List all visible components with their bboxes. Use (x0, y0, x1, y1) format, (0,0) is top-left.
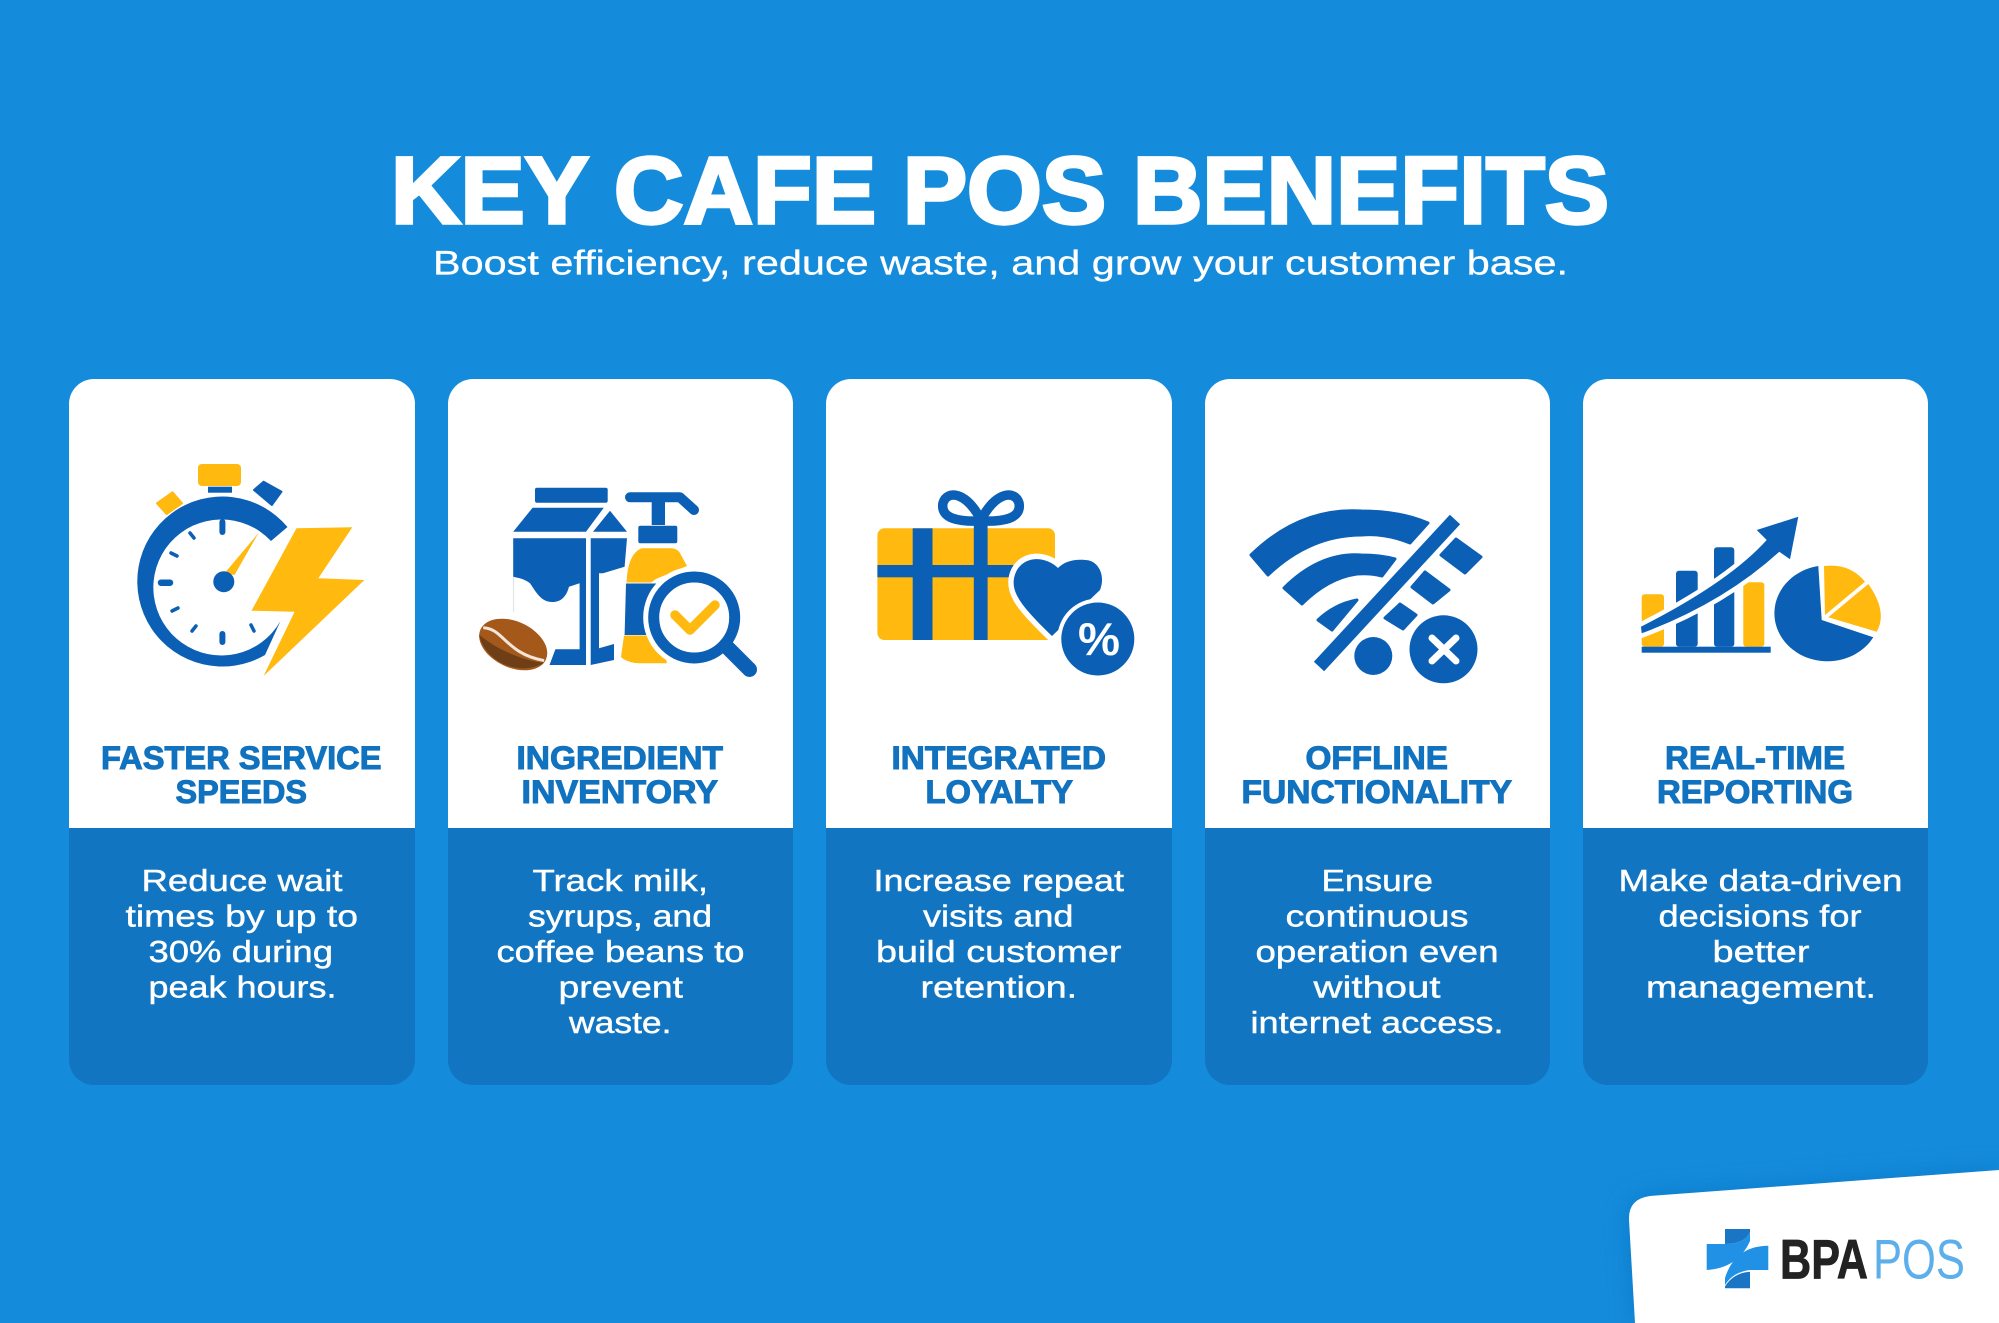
heading (1242, 740, 1512, 810)
card bottom (448, 828, 793, 1085)
description (874, 864, 1125, 1004)
description: syrups, and (528, 900, 712, 934)
description: Track milk, (532, 864, 708, 898)
panel: faster service speeds (69, 379, 415, 1085)
logo mark: cross (1707, 1229, 1768, 1288)
heading: SPEEDS (176, 774, 307, 810)
description: times by up to (126, 900, 358, 934)
icon: stopwatch with lightning bolt (137, 464, 364, 676)
heading: LOYALTY (926, 774, 1073, 810)
description: management. (1646, 970, 1876, 1004)
heading (101, 740, 382, 810)
subtitle: Boost efficiency, reduce waste, and grow your customer base. (433, 244, 1568, 282)
description: continuous (1286, 900, 1468, 934)
description: Increase repeat (874, 864, 1125, 898)
heading: FUNCTIONALITY (1242, 774, 1512, 810)
icon: bar chart, arrow and pie chart (1641, 517, 1881, 661)
description: coffee beans to (496, 935, 744, 969)
description: Make data-driven (1618, 864, 1902, 898)
description: prevent (558, 970, 684, 1004)
panel: real-time reporting (1583, 379, 1928, 1085)
description: peak hours. (148, 970, 336, 1004)
description: build customer (876, 935, 1122, 969)
heading: INVENTORY (522, 774, 718, 810)
card top (826, 379, 1172, 828)
card bottom (826, 828, 1172, 1085)
description: decisions for (1658, 900, 1862, 934)
heading: INTEGRATED (892, 740, 1106, 776)
description: retention. (920, 970, 1077, 1004)
heading (516, 740, 723, 810)
description (1618, 864, 1902, 1004)
heading: OFFLINE (1306, 740, 1448, 776)
heading: INGREDIENT (516, 740, 723, 776)
icon: crossed-out wifi (1251, 511, 1481, 683)
icon: gift, heart and percent badge: % (1078, 613, 1120, 665)
icon: milk carton, bottle, bean and magnifier (471, 488, 750, 681)
title: KEY CAFE POS BENEFITS (391, 138, 1609, 244)
card top (448, 379, 793, 828)
card bottom (1583, 828, 1928, 1085)
heading: REAL-TIME (1665, 740, 1845, 776)
description (496, 864, 744, 1040)
description (1250, 864, 1504, 1040)
description: operation even (1256, 935, 1498, 969)
logo wordmark: POS (1873, 1228, 1965, 1290)
panel: ingredient inventory (448, 379, 793, 1085)
description: without (1312, 970, 1441, 1004)
logo wordmark (1780, 1228, 1965, 1290)
card top (1583, 379, 1928, 828)
icon: gift, heart and percent badge (877, 495, 1134, 676)
heading (892, 740, 1106, 810)
description (126, 864, 358, 1004)
card top (69, 379, 415, 828)
card bottom (1205, 828, 1550, 1085)
description: 30% during (148, 935, 333, 969)
description: Reduce wait (142, 864, 343, 898)
description: waste. (568, 1006, 672, 1040)
card top (1205, 379, 1550, 828)
panel: integrated loyalty (826, 379, 1172, 1085)
card bottom (69, 828, 415, 1085)
panel: offline functionality (1205, 379, 1550, 1085)
description: visits and (923, 900, 1074, 934)
logo badge (1629, 1170, 1999, 1323)
logo wordmark: BPA (1780, 1228, 1868, 1290)
heading (1657, 740, 1853, 810)
description: Ensure (1322, 864, 1433, 898)
description: internet access. (1250, 1006, 1504, 1040)
heading: FASTER SERVICE (101, 740, 382, 776)
description: better (1712, 935, 1810, 969)
heading: REPORTING (1657, 774, 1853, 810)
